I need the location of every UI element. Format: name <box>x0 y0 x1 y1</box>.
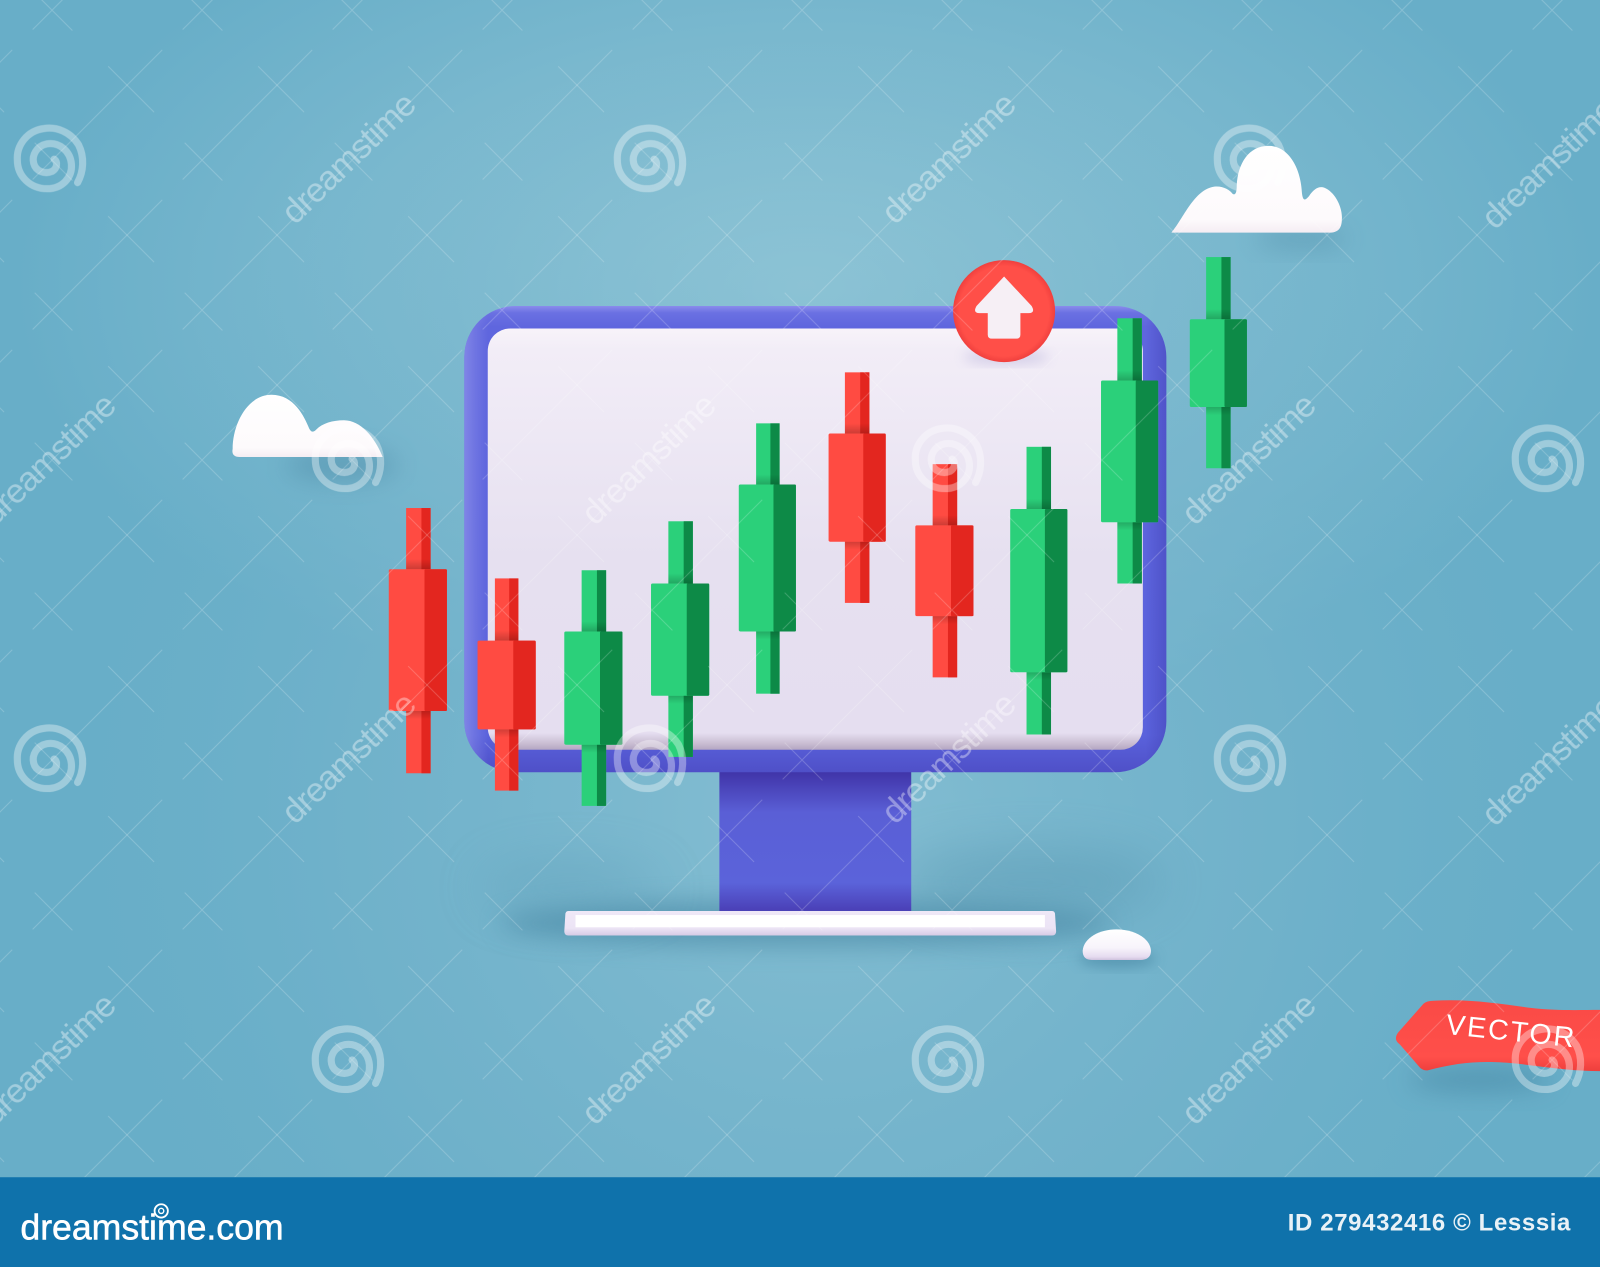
ribbon label: VECTOR <box>1445 1009 1576 1054</box>
cloud right <box>1171 146 1342 233</box>
watermark text: dreamstime <box>574 986 724 1132</box>
watermark spirals <box>17 128 1581 1089</box>
watermark text: dreamstime <box>274 685 424 831</box>
footer logo: dreamstime.com <box>20 1207 284 1247</box>
watermark text: dreamstime <box>1174 986 1324 1132</box>
mouse <box>1083 929 1151 960</box>
monitor screen <box>488 328 1143 750</box>
watermark text: dreamstime <box>274 85 424 231</box>
candle 8 green <box>1010 447 1067 734</box>
monitor base <box>564 911 1056 935</box>
watermark text: dreamstime <box>1174 386 1324 532</box>
candle 10 green <box>1190 257 1247 468</box>
vector ribbon <box>1396 1000 1600 1071</box>
candle 2 red <box>478 578 536 791</box>
monitor frame <box>464 306 1166 772</box>
watermark text: dreamstime <box>874 685 1024 831</box>
icon: up arrow badge <box>953 260 1055 364</box>
footer image id and credit: ID 279432416 © Lesssia <box>1288 1209 1571 1236</box>
candle 7 red <box>915 464 973 677</box>
cloud left <box>232 395 383 457</box>
candle 3 green <box>564 570 622 806</box>
footer bar <box>0 1177 1600 1267</box>
candlestick chart <box>389 257 1247 806</box>
candle 9 green <box>1101 318 1158 584</box>
watermark text: dreamstime <box>574 386 724 532</box>
candle 6 red <box>829 372 886 603</box>
monitor <box>464 306 1166 935</box>
candle 4 green <box>651 521 709 757</box>
candle 1 red <box>389 508 447 773</box>
monitor stand <box>719 770 911 911</box>
candle 5 green <box>739 423 796 694</box>
watermark text: dreamstime <box>874 85 1024 231</box>
ground shadows <box>286 230 1551 1092</box>
